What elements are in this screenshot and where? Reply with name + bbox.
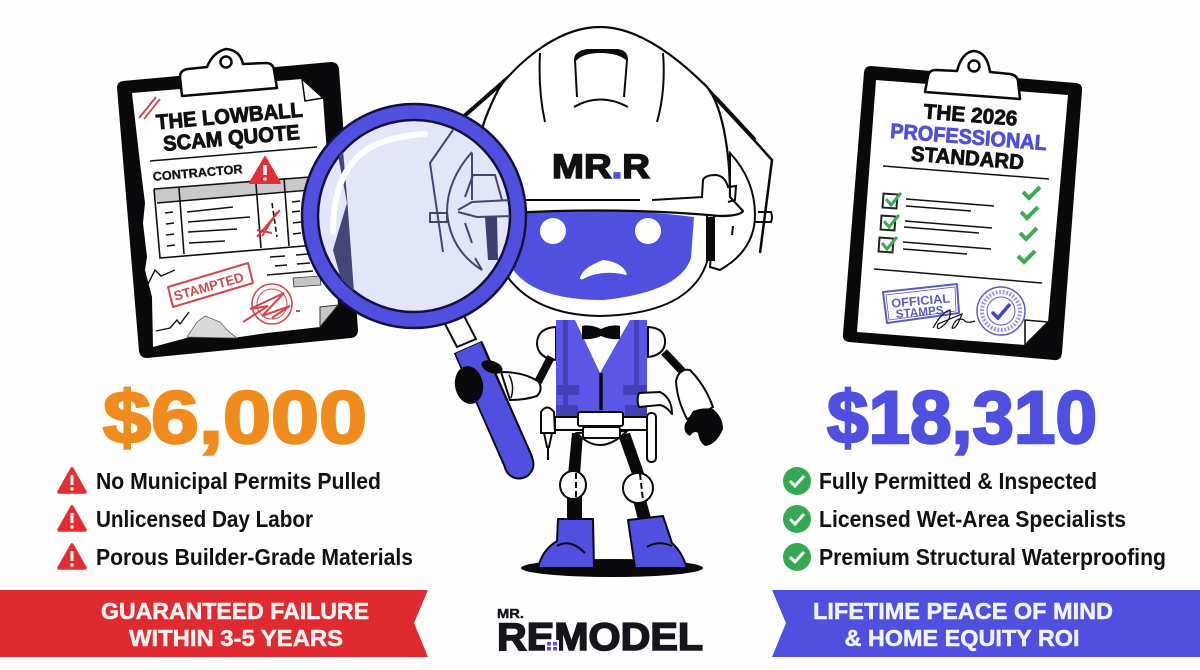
gripping hand: [452, 358, 504, 406]
left arm: [501, 357, 551, 400]
heading: the lowball scam quote: SCAM QUOTE: [162, 121, 301, 156]
icon: green check: [783, 467, 811, 495]
clipboard clip: [180, 49, 277, 96]
stamp: stampted: STAMPTED: [172, 269, 246, 304]
frowning mouth: [580, 260, 627, 279]
checklist: [879, 193, 994, 254]
benefit text: waterproofing: Premium Structural Waterproofing: [819, 544, 1166, 570]
panel: lowball scam quote clipboard: [117, 49, 358, 358]
magnifying glass lens: [302, 104, 526, 328]
ground shadow: [521, 559, 703, 577]
banner: guaranteed failure: GUARANTEED FAILURE: [101, 598, 369, 624]
risk text: permits: No Municipal Permits Pulled: [96, 468, 381, 494]
boots: [538, 516, 687, 568]
heading: the 2026 professional standard: STANDARD: [910, 143, 1025, 174]
heading: the 2026 professional standard: THE 2026: [923, 100, 1018, 131]
stamp: official stamps: OFFICIAL: [891, 291, 951, 311]
knees: [560, 471, 653, 503]
paper sheet: [857, 80, 1068, 345]
list: lowball risks: [59, 468, 413, 570]
tool belt: [555, 412, 650, 445]
risk text: materials: Porous Builder-Grade Materials: [96, 544, 413, 570]
right ear muff: [707, 153, 772, 270]
illustration: robot mascot: [302, 27, 772, 577]
round seal: [977, 287, 1025, 335]
banner: lifetime peace of mind: & HOME EQUITY ROI: [844, 625, 1080, 651]
icon: warning triangle: [59, 469, 85, 492]
green check column: [1018, 187, 1040, 262]
magnifier handle neck: [444, 312, 476, 347]
banner: lifetime peace of mind: [772, 590, 1200, 657]
icon: logo window squares: [545, 640, 559, 651]
hard hat: [458, 27, 743, 216]
right arm: [664, 352, 723, 446]
banner: guaranteed failure: WITHIN 3-5 YEARS: [129, 625, 343, 651]
icon: warning on table: [250, 157, 280, 183]
drill: [541, 408, 555, 460]
icon: green check: [783, 505, 811, 533]
heading: the lowball scam quote: THE LOWBALL: [155, 99, 304, 134]
banner: guaranteed failure: [0, 590, 428, 657]
text lines under table: [267, 254, 313, 275]
list: professional benefits: [783, 467, 1166, 571]
right price: $18,310: $18,310: [827, 376, 1097, 459]
contractor label: CONTRACTOR: [152, 162, 243, 184]
clipboard board: [117, 62, 358, 358]
stamp: official stamps: [883, 284, 959, 323]
folded corner: [1025, 320, 1048, 345]
clipboard clip: [925, 51, 1020, 99]
stamp: stampted: [168, 263, 253, 307]
banner: lifetime peace of mind: LIFETIME PEACE OF MIND: [813, 598, 1113, 624]
bow tie: [582, 325, 620, 339]
clipboard board: [843, 66, 1082, 360]
left price: $6,000: $6,000: [103, 376, 367, 459]
blue face: [510, 210, 694, 300]
round stamp with signature: [243, 284, 300, 324]
benefit text: specialists: Licensed Wet-Area Specialists: [819, 506, 1126, 532]
blue vest: [556, 320, 647, 417]
risk text: labor: Unlicensed Day Labor: [96, 506, 313, 532]
heading: the 2026 professional standard: PROFESSIONAL: [889, 120, 1048, 155]
eyes: [540, 218, 661, 244]
heading: the 2026 professional standard: [889, 100, 1048, 174]
hammer: [638, 392, 672, 462]
heading: the lowball scam quote: [155, 99, 304, 156]
magnifier handle: [468, 347, 534, 480]
red slash marks: [139, 97, 160, 119]
legs: [567, 433, 651, 522]
head: [500, 210, 707, 316]
quote table: [154, 177, 316, 258]
folded corner top right: [302, 79, 323, 101]
torn paper sheet: [132, 79, 338, 347]
paper cracks and tears: [148, 270, 338, 338]
benefit text: permitted: Fully Permitted & Inspected: [819, 468, 1097, 494]
icon: warning triangle: [59, 545, 85, 568]
panel: professional standard clipboard: [843, 51, 1082, 360]
signature: [933, 310, 975, 328]
logo: mr remodel: MR.: [497, 606, 524, 621]
helmet lettering: MR.R: MR.R: [552, 148, 650, 186]
shoulders: [537, 327, 665, 360]
helmet back flap: [462, 76, 772, 253]
lens reflection and magnified view: [333, 130, 515, 292]
stamp: official stamps: STAMPS: [895, 303, 944, 321]
icon: warning triangle: [59, 507, 85, 530]
logo: mr remodel: REMODEL: [497, 616, 703, 659]
icon: green check: [783, 543, 811, 571]
